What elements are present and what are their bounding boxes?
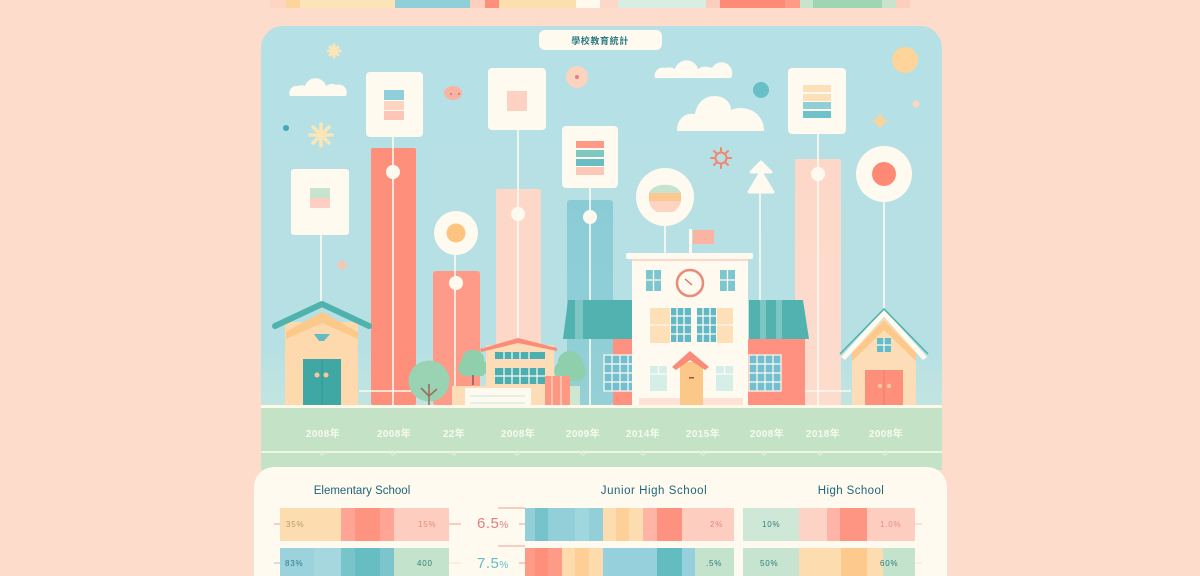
icon: trees: [408, 350, 586, 405]
heading: junior high school: Junior High School: [601, 485, 707, 497]
callout: middle values: [477, 508, 525, 572]
year labels: 2009年: [566, 427, 600, 440]
chart: high school bars: 10%: [762, 520, 780, 529]
year labels: 2008年: [750, 427, 784, 440]
circular markers: [386, 146, 912, 290]
chart: high school bars: 1.0%: [880, 520, 901, 529]
chart: elementary school bars: 400: [417, 559, 433, 568]
icon: right house: [840, 309, 928, 405]
icon: main school: [563, 229, 809, 405]
timeline ticks: [320, 451, 887, 455]
heading: high school: High School: [818, 485, 884, 497]
callout: middle values: 7.5%: [477, 555, 509, 572]
chart: high school bars: 60%: [880, 559, 898, 568]
panel: school scene: [261, 26, 942, 470]
chart: elementary school bars: 35%: [286, 520, 304, 529]
year labels: 2014年: [626, 427, 660, 440]
school wings: [563, 300, 809, 405]
bar chart: vertical bars: [371, 148, 841, 405]
top strip: previous panel's bars: [270, 0, 910, 8]
panel: school level comparison: [254, 467, 947, 576]
year labels: 2008年: [869, 427, 903, 440]
icon: left house: [275, 304, 369, 405]
chart: elementary school bars: [274, 508, 461, 576]
chart: junior high school bars: .5%: [706, 559, 722, 568]
year labels: 2008年: [377, 427, 411, 440]
heading: elementary school: Elementary School: [314, 485, 410, 497]
chart: junior high school bars: 2%: [710, 520, 723, 529]
title pill: [539, 30, 662, 50]
clouds: [289, 60, 764, 131]
year labels: [306, 427, 903, 440]
chart: high school bars: [743, 508, 922, 576]
ground timeline: [261, 405, 942, 470]
callout cards: [291, 68, 846, 235]
year labels: 2008年: [306, 427, 340, 440]
icon: small school: [452, 338, 580, 409]
year labels: 2015年: [686, 427, 720, 440]
icons: sky decorations: [283, 45, 920, 272]
title pill: 學校教育統計: [571, 35, 629, 46]
chart: elementary school bars: 83%: [285, 559, 303, 568]
year labels: 2008年: [501, 427, 535, 440]
icon: white tree: [749, 162, 773, 192]
chart: high school bars: 50%: [760, 559, 778, 568]
chart: junior high school bars: [525, 508, 734, 576]
chart: elementary school bars: 15%: [418, 520, 436, 529]
sky background: [261, 26, 942, 470]
callout: middle values: 6.5%: [477, 515, 509, 532]
year labels: 22年: [443, 427, 465, 440]
connector lines: [321, 130, 884, 405]
year labels: 2018年: [806, 427, 840, 440]
